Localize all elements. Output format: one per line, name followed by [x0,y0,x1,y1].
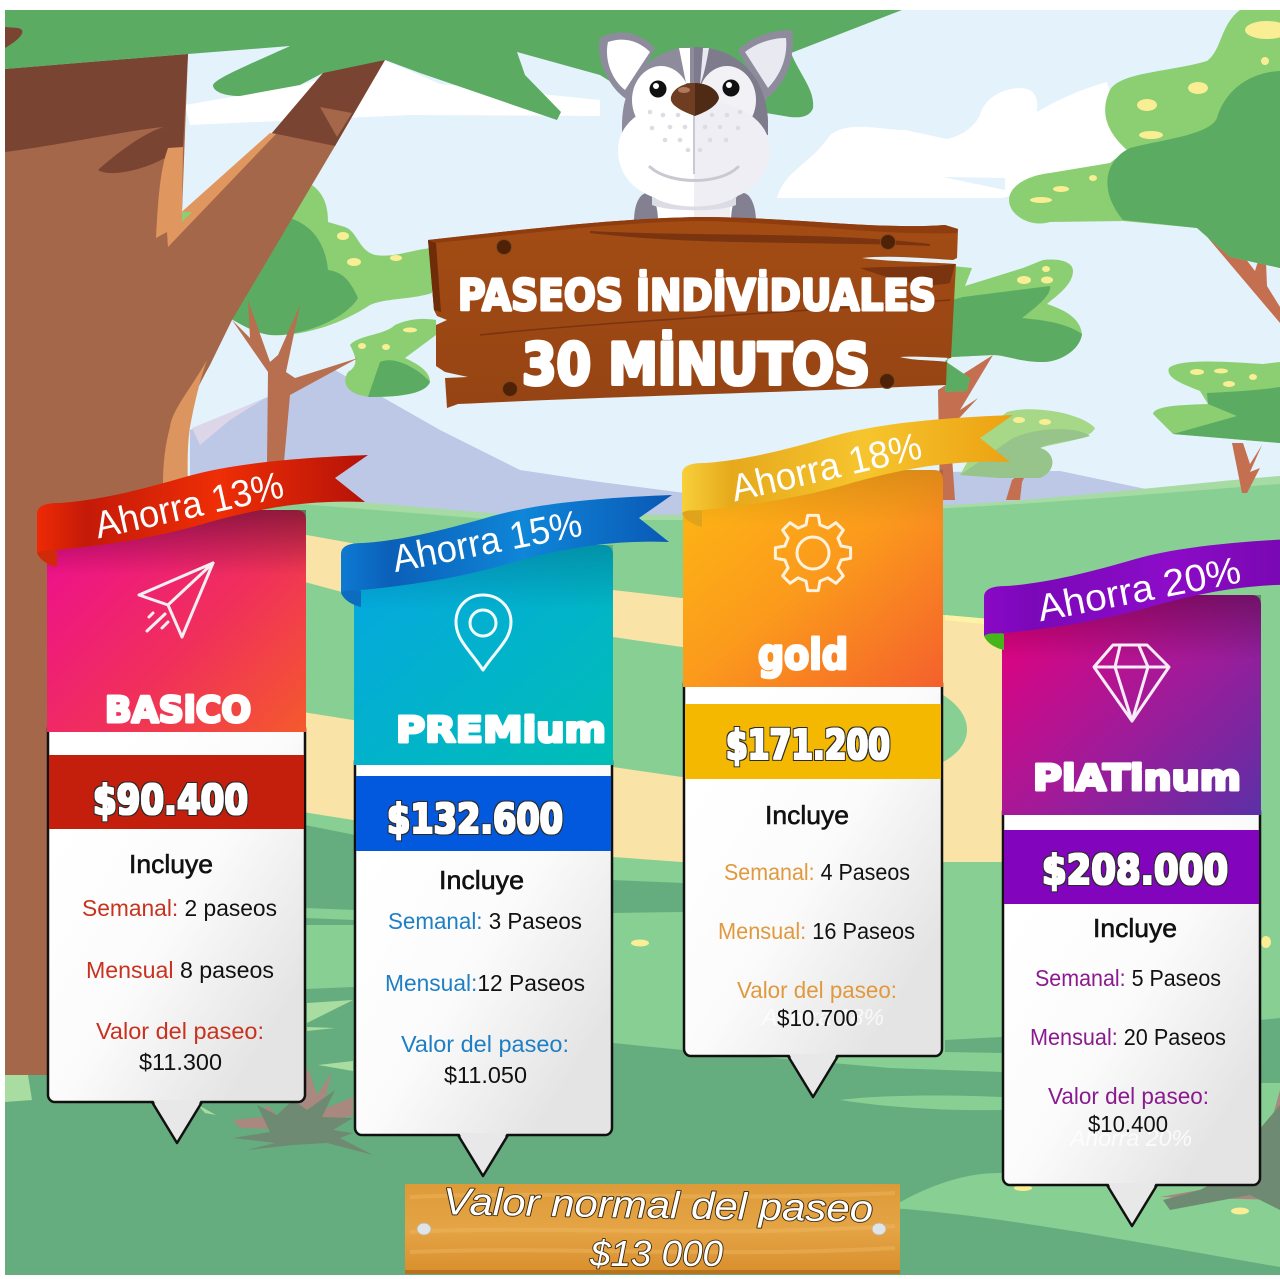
plan name: gold [758,630,848,679]
dog head [622,47,768,135]
monthly: Mensual: 16 Paseos [718,918,915,944]
price band [49,755,304,829]
top right tree [1203,232,1280,323]
nails [496,234,896,396]
price band [685,704,941,779]
callout pointer [788,1056,838,1097]
card header [354,545,613,765]
plank text line 2: $13 000 [589,1233,723,1274]
icon: gear [775,515,851,591]
wooden title sign [428,217,958,408]
panel: premium [354,545,613,1176]
icon: diamond [1094,645,1169,721]
light ground strip [840,1095,1002,1110]
card header [683,470,943,687]
card body [684,677,942,1056]
ribbon label: Ahorra 18% [727,426,926,510]
callout pointer [152,1102,202,1143]
ribbon label: Ahorra 15% [389,503,585,581]
card body [1003,805,1260,1185]
ribbon label: Ahorra 20% [1034,550,1244,630]
tree behind sign [938,355,993,500]
walk value label: Valor del paseo: [401,1031,569,1057]
price: $171.200 [726,721,890,769]
includes heading: Incluye [439,865,524,895]
walk value: $10.700 [777,1005,858,1031]
card body [48,722,305,1102]
darker ground [5,825,1280,1275]
walk value: $11.300 [139,1049,222,1075]
card header [1002,595,1261,815]
panel: platinum [1002,595,1261,1226]
price band [1004,830,1259,904]
foliage: top canopy [5,10,902,120]
weekly: Semanal: 4 Paseos [724,859,910,885]
price: $132.600 [387,795,563,843]
icon: paper plane [139,563,213,637]
ghost text: Ahorra 18% [760,1004,884,1030]
path bands [290,532,1002,862]
weekly: Semanal: 2 paseos [82,895,277,921]
mountains [190,369,1160,520]
walk value: $10.400 [1088,1111,1168,1137]
plan name: PlATinum [1033,758,1241,799]
plank text line 1: Valor normal del paseo [443,1181,873,1231]
walk value label: Valor del paseo: [737,977,897,1003]
dog nose [671,83,719,116]
ribbon: ahorra 20% [984,538,1280,650]
plan name: PREMium [396,710,606,751]
card header [47,510,306,732]
tree knot [5,27,22,48]
monthly: Mensual 8 paseos [86,957,274,983]
price: $90.400 [93,776,248,824]
includes heading: Incluye [765,800,849,830]
price band [356,776,611,851]
ribbon: ahorra 15% [341,495,672,607]
callout pointer [458,1135,508,1176]
foliage: left bushes [225,185,436,462]
title line 1: PASEOS İNDİVİDUALES [458,270,936,321]
plan name: BASiCO [105,690,251,731]
includes heading: Incluye [1093,913,1177,943]
panel: gold [683,470,943,1097]
ribbon: ahorra 13% [37,455,368,567]
tree: left trunk and branch [5,54,385,1075]
ground dots [631,936,1271,1214]
price: $208.000 [1042,846,1228,894]
card body [355,755,612,1135]
dog eyes [650,80,740,98]
panel: basico [47,510,306,1143]
ground [5,476,1280,1275]
dog paws and neck [634,193,756,225]
ghost text: Ahorra 20% [1068,1125,1192,1151]
grass tufts [5,1000,1280,1210]
weekly: Semanal: 3 Paseos [388,908,582,934]
callout pointer [1107,1185,1157,1226]
clouds [185,60,1127,198]
foliage: right trees and bushes [938,10,1280,500]
icon: map pin [456,595,511,670]
weekly: Semanal: 5 Paseos [1035,965,1221,991]
ribbon label: Ahorra 13% [91,465,287,547]
includes heading: Incluye [129,849,213,879]
pale small tree [1006,466,1030,500]
ribbon: ahorra 18% [682,415,1013,527]
icon: dog ears [599,30,793,100]
plank screws [417,1223,886,1235]
monthly: Mensual: 20 Paseos [1030,1024,1226,1050]
walk value label: Valor del paseo: [96,1018,264,1044]
walk value: $11.050 [444,1062,527,1088]
title line 2: 30 MİNUTOS [522,331,870,398]
wooden plank: normal price [405,1181,900,1274]
walk value label: Valor del paseo: [1048,1083,1209,1109]
dog mascot [599,30,793,225]
monthly: Mensual:12 Paseos [385,970,585,996]
right lower tree [1232,443,1262,493]
dog muzzle [618,100,770,204]
